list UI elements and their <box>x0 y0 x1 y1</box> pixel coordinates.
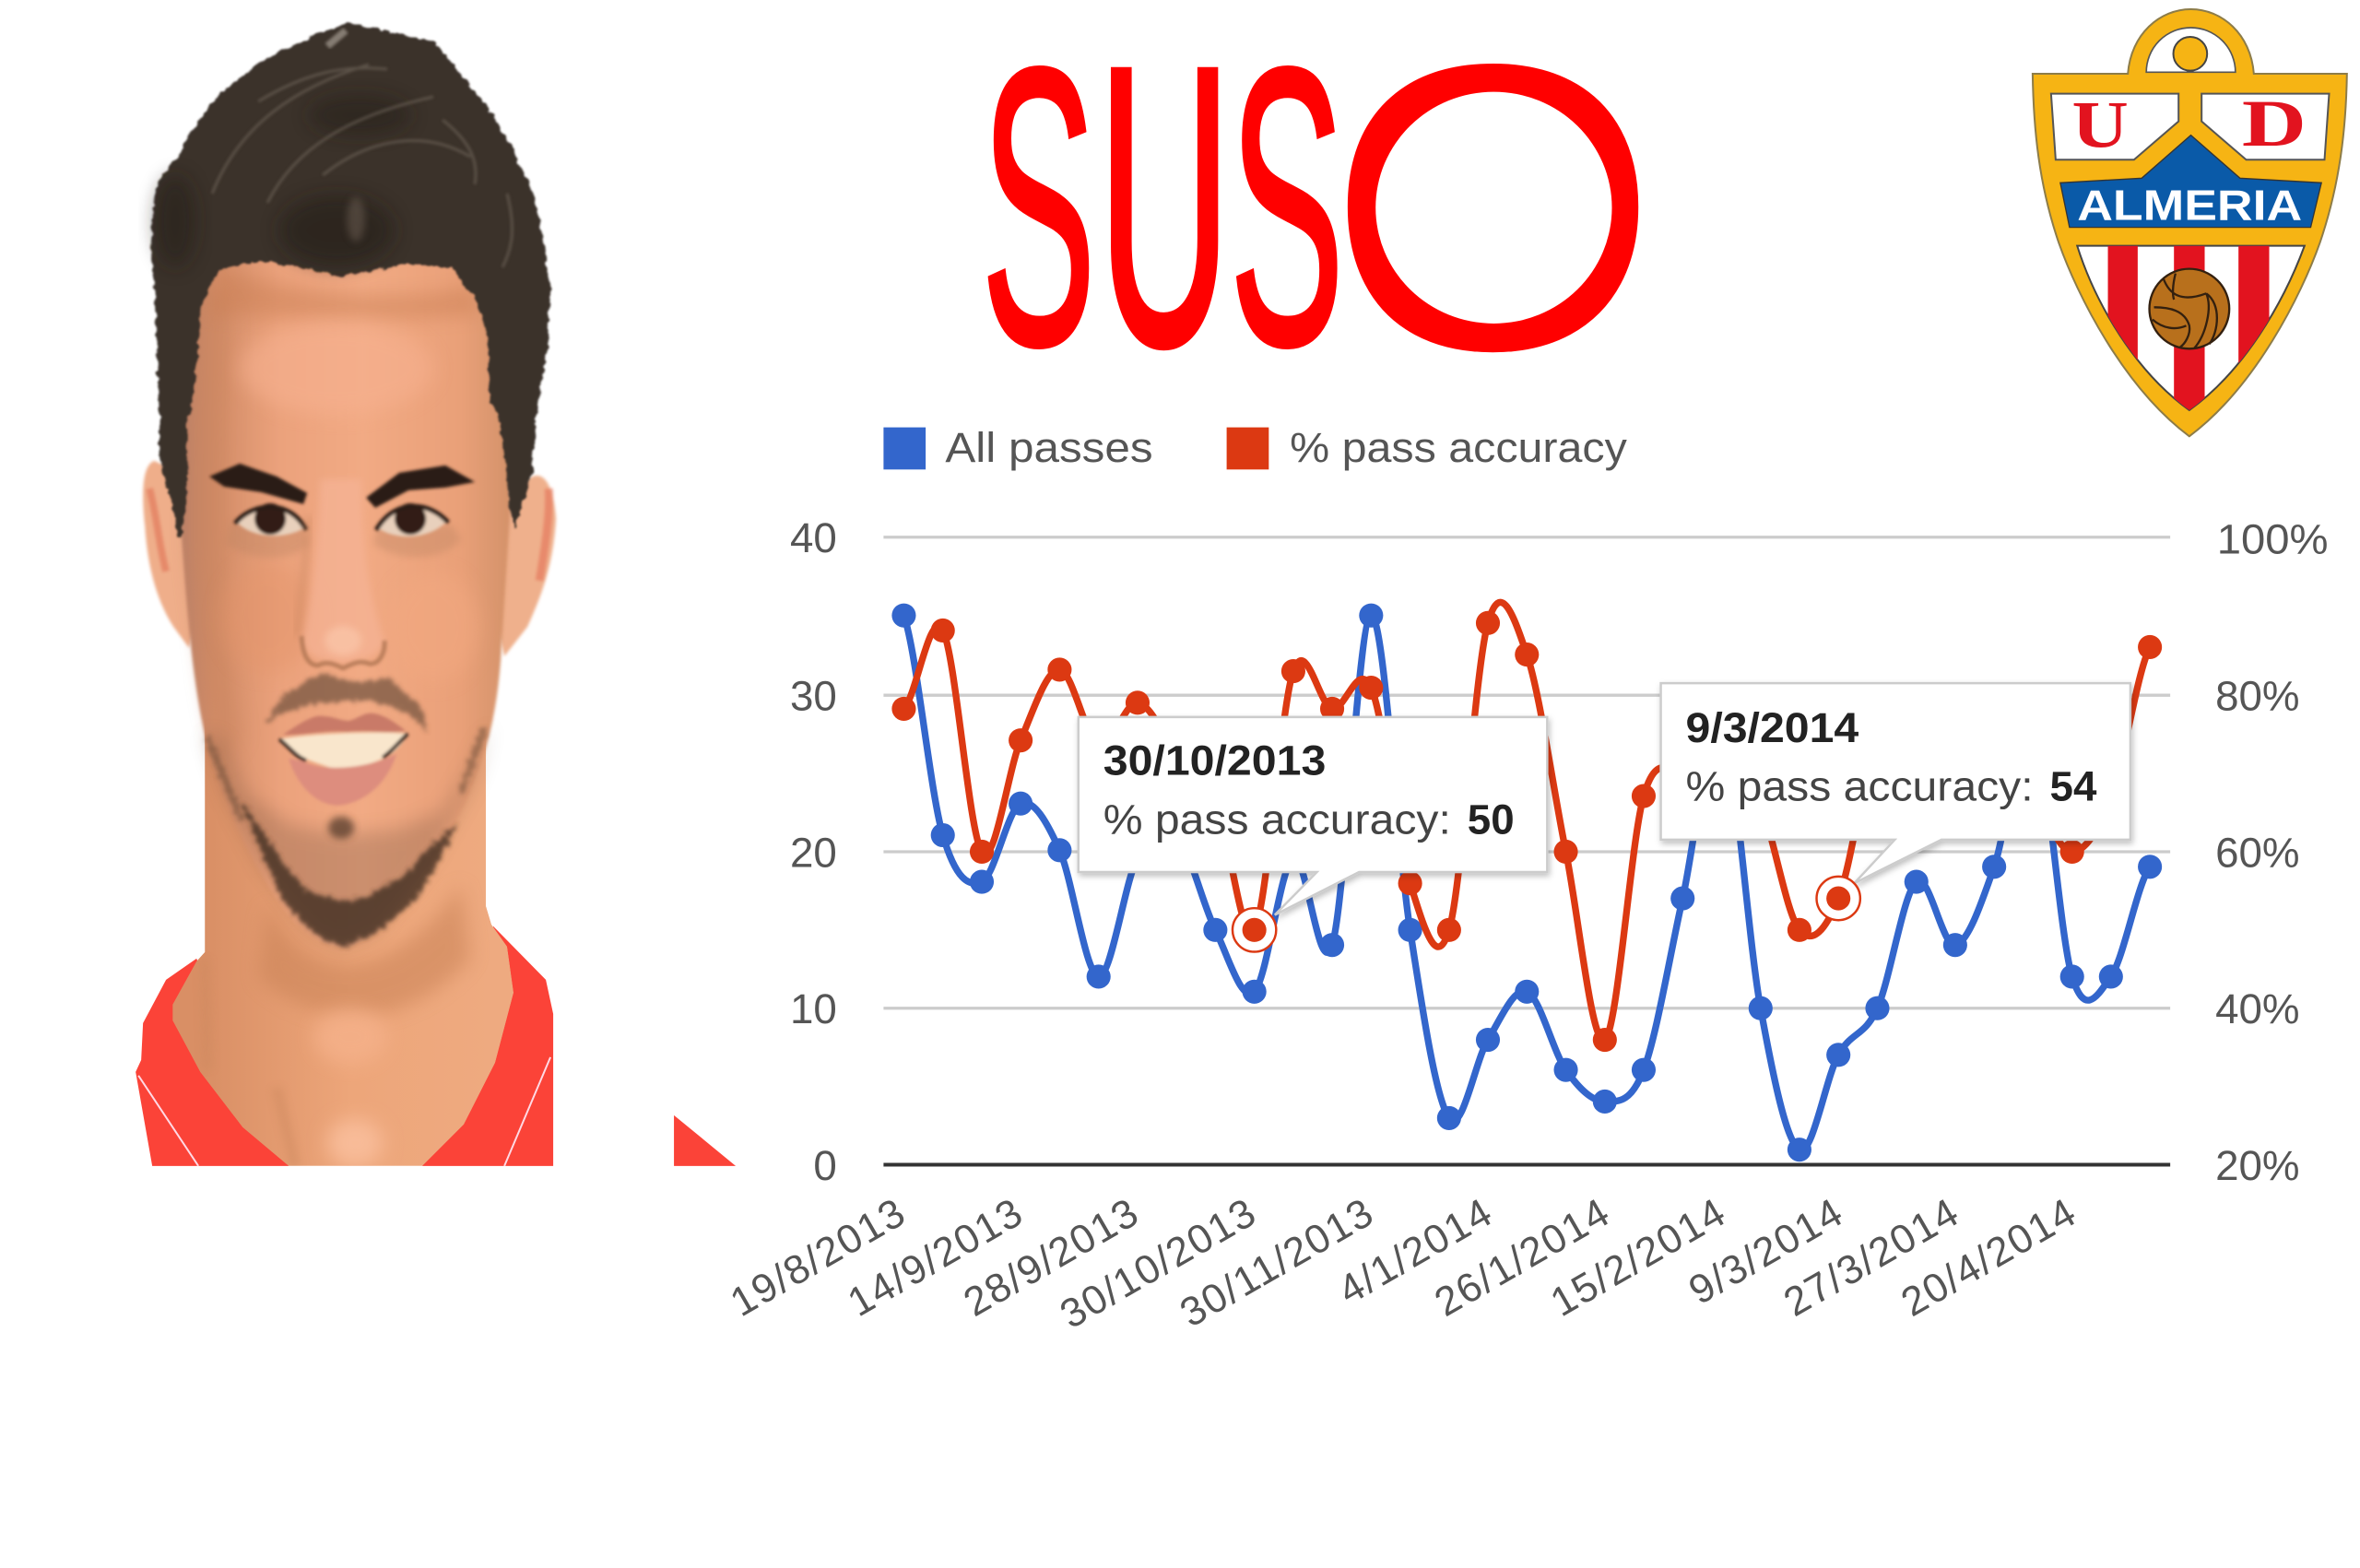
x axis date labels: 9/3/2014 <box>1682 1189 1851 1314</box>
x axis date labels: 19/8/2013 <box>723 1189 914 1326</box>
D panel: D <box>2242 88 2307 160</box>
right axis labels: 80% <box>2215 673 2300 720</box>
x axis date labels: 27/3/2014 <box>1776 1189 1967 1326</box>
club crest: UD Almeria <box>2033 9 2347 436</box>
tooltip: 9/3/2014 <box>1661 683 2130 883</box>
neck <box>172 719 513 1167</box>
U panel <box>2051 88 2178 161</box>
hair <box>150 23 550 537</box>
blue band with name: ALMERIA <box>2077 182 2302 230</box>
series: all passes <box>891 604 2162 1161</box>
tooltip: 9/3/2014: 54 <box>2050 762 2097 809</box>
highlighted point: 30/10/2013 <box>1233 908 1276 952</box>
x axis date labels: 15/2/2014 <box>1543 1189 1734 1326</box>
forehead and cheek shading <box>189 267 479 765</box>
series: % pass accuracy <box>891 602 2162 1052</box>
face <box>175 244 516 948</box>
left axis labels: 20 <box>790 829 837 876</box>
x axis date labels: 30/11/2013 <box>1173 1189 1382 1336</box>
left axis labels: 30 <box>790 673 837 720</box>
mouth <box>279 713 407 806</box>
x axis date labels <box>723 1189 2084 1338</box>
D panel <box>2201 88 2329 160</box>
nose <box>297 479 384 668</box>
left axis labels: 40 <box>790 514 837 561</box>
tooltip: 30/10/2013: 30/10/2013 <box>1103 737 1326 784</box>
left axis labels: 10 <box>790 985 837 1032</box>
beard stubble <box>205 673 491 948</box>
x axis date labels: 20/4/2014 <box>1894 1189 2084 1326</box>
highlighted point: 9/3/2014 <box>1817 877 1860 920</box>
eyebrows <box>209 464 475 508</box>
tooltip: 30/10/2013: % pass accuracy: <box>1103 796 1451 843</box>
x axis date labels: 14/9/2013 <box>841 1189 1031 1326</box>
legend: All passes <box>945 424 1153 471</box>
legend: % pass accuracy <box>1290 424 1627 471</box>
red shirt collar and shoulder <box>136 926 736 1166</box>
left axis labels <box>790 514 837 1189</box>
right axis labels <box>2215 516 2329 1189</box>
legend <box>883 424 1627 471</box>
U panel: U <box>2072 88 2129 161</box>
x axis date labels: 30/10/2013 <box>1053 1189 1265 1338</box>
x axis date labels: 26/1/2014 <box>1427 1189 1618 1326</box>
gridlines <box>883 537 2170 1008</box>
blue band with name <box>2060 136 2321 230</box>
right axis labels: 60% <box>2215 829 2300 876</box>
x axis date labels: 28/9/2013 <box>956 1189 1147 1326</box>
right axis labels: 100% <box>2217 516 2329 563</box>
chart: all passes and % pass accuracy <box>723 424 2329 1338</box>
right axis labels: 20% <box>2215 1142 2300 1189</box>
football <box>2150 269 2229 348</box>
ears <box>143 461 556 656</box>
x axis date labels: 4/1/2014 <box>1330 1189 1501 1314</box>
eyes <box>235 503 448 536</box>
tooltip: 30/10/2013 <box>1079 717 1547 915</box>
tooltip: 30/10/2013: 50 <box>1468 796 1515 843</box>
right axis labels: 40% <box>2215 985 2300 1032</box>
tooltip: 9/3/2014: 9/3/2014 <box>1685 704 1859 751</box>
left axis labels: 0 <box>813 1142 837 1189</box>
tooltip: 9/3/2014: % pass accuracy: <box>1685 762 2034 809</box>
shield body <box>2033 9 2347 436</box>
striped lower shield <box>2077 246 2305 412</box>
title: SUSO <box>982 0 1658 435</box>
baseline <box>883 1163 2170 1166</box>
portrait photo of Suso <box>136 23 736 1167</box>
anchor ring <box>2146 28 2236 72</box>
